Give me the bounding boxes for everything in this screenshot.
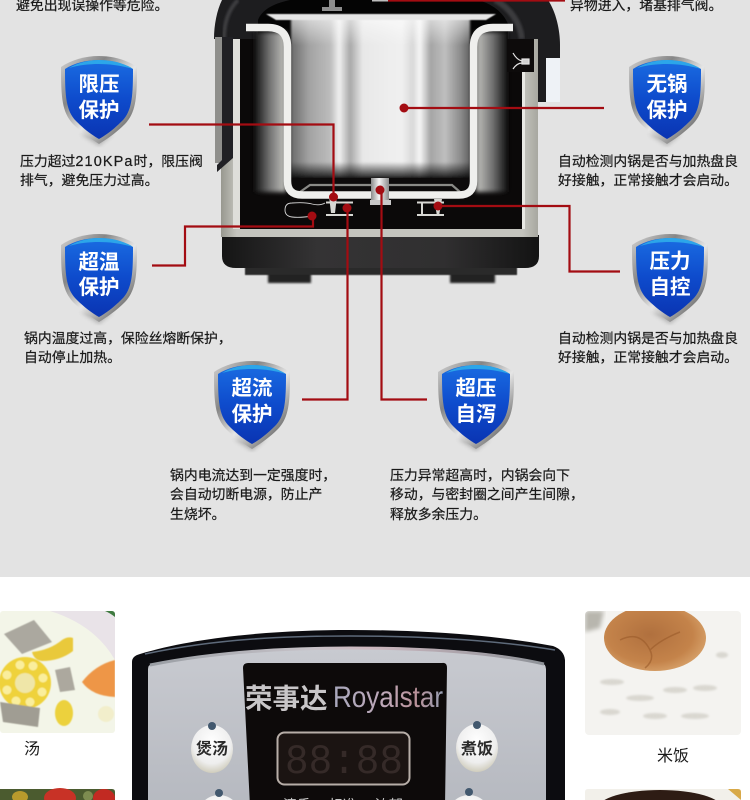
panel outer black frame xyxy=(132,630,565,800)
shield: limit pressure protection: 保护 xyxy=(78,99,120,122)
label: rice: 米饭 xyxy=(657,747,689,765)
connector: no pot line xyxy=(400,104,604,112)
left white trim xyxy=(233,39,240,229)
shield: over temperature protection xyxy=(61,234,137,324)
photo: dark sauce bowl (cropped) xyxy=(585,789,741,800)
panel: white food section background xyxy=(0,577,750,800)
text: limit pressure description: 压力超过210KPa时，限压阀 xyxy=(20,153,203,170)
outer white pot liner xyxy=(246,28,513,195)
shield: over pressure self release: 自泻 xyxy=(456,403,496,426)
connector: pressure control line xyxy=(434,202,620,272)
lid inner shading xyxy=(258,0,508,39)
right glow xyxy=(476,32,508,192)
text: over current description: 生烧坏。 xyxy=(170,506,225,522)
button: cook rice xyxy=(456,721,498,772)
shield: over current protection: 超流 xyxy=(232,377,273,400)
under pot space xyxy=(291,178,470,192)
photo: rice with plum xyxy=(585,605,741,735)
top valve stem xyxy=(322,0,342,11)
shield: pressure auto control: 压力 xyxy=(650,250,690,273)
text: limit pressure description: 排气，避免压力过高。 xyxy=(20,172,158,188)
connector: limit valve line xyxy=(149,124,338,202)
connector: over current line xyxy=(302,204,352,400)
label: soup: 汤 xyxy=(24,740,40,758)
fuse wire xyxy=(285,203,325,217)
shield: no pot protection xyxy=(629,56,705,146)
text: pressure control description: 自动检测内锅是否与加热盘良 xyxy=(558,330,738,346)
panel silver plate xyxy=(148,647,546,800)
left handle strip xyxy=(215,37,222,163)
text: over temperature description: 自动停止加热。 xyxy=(24,349,121,365)
shield: over current protection: 保护 xyxy=(232,403,272,426)
cooker feet xyxy=(268,268,495,283)
photo: soup xyxy=(0,611,115,733)
lid highlight curve xyxy=(495,0,522,39)
shield: over temperature protection: 超温 xyxy=(78,251,120,274)
shield: over temperature protection: 保护 xyxy=(78,276,120,299)
button: cook rice: 煮饭 xyxy=(461,740,493,758)
text: over current description: 会自动切断电源，防止产 xyxy=(170,486,322,502)
cooker black interior xyxy=(240,39,523,229)
brand name Chinese: 荣事达 xyxy=(245,683,328,714)
button: soup: 煲汤 xyxy=(196,740,228,758)
left handle xyxy=(217,37,233,172)
lid shell and right handle xyxy=(214,0,560,102)
brand name Latin: Royalstar xyxy=(333,681,443,714)
shield: limit pressure protection: 限压 xyxy=(78,73,120,96)
LED display xyxy=(278,732,410,784)
heating plate xyxy=(300,185,460,192)
black sensor box xyxy=(507,39,534,72)
top sensor xyxy=(372,0,388,2)
text: over pressure description: 释放多余压力。 xyxy=(390,506,487,522)
left limit valve assembly xyxy=(326,196,353,216)
button: lower right xyxy=(455,788,483,800)
text: over current description: 锅内电流达到一定强度时， xyxy=(170,467,336,483)
shield: pressure auto control: 自控 xyxy=(650,276,690,299)
photo: vegetables (cropped) xyxy=(0,788,115,800)
panel top rim strip xyxy=(150,648,544,665)
text: over temperature description: 锅内温度过高，保险丝熔断保护， xyxy=(24,330,232,346)
button: soup xyxy=(191,722,233,773)
LED digits: 88:88 xyxy=(285,738,403,786)
shield: over current protection xyxy=(214,361,290,451)
text: no pot description: 自动检测内锅是否与加热盘良 xyxy=(558,153,738,169)
cooker silver body xyxy=(221,39,538,237)
right white panel xyxy=(546,58,560,102)
connector: top sensor line xyxy=(388,0,565,2)
button: lower left xyxy=(205,789,233,800)
text: over pressure description: 压力异常超高时，内锅会向下 xyxy=(390,467,570,483)
cooker lower step xyxy=(245,264,517,275)
shield: no pot protection: 无锅 xyxy=(646,73,688,96)
text: pressure control description: 好接触，正常接触才会启动。 xyxy=(558,349,738,365)
sensor icon xyxy=(513,53,529,69)
left lid highlight curve xyxy=(224,0,238,39)
cooker base xyxy=(222,235,539,268)
centre pressure tube xyxy=(370,178,391,205)
text: no pot description: 好接触，正常接触才会启动。 xyxy=(558,172,738,188)
inner pot xyxy=(291,16,470,178)
left glow xyxy=(254,32,286,192)
text: over pressure description: 移动，与密封圈之间产生间隙， xyxy=(390,486,584,502)
right white trim xyxy=(522,39,525,229)
shield: pressure auto control xyxy=(632,234,708,324)
shield: limit pressure protection xyxy=(61,56,137,146)
shield: over pressure self release: 超压 xyxy=(456,377,496,400)
control panel xyxy=(132,630,565,800)
shield: no pot protection: 保护 xyxy=(646,99,688,122)
black display area xyxy=(243,663,447,800)
shield: over pressure self release xyxy=(438,361,514,451)
panel rim highlight xyxy=(145,636,555,654)
connector: over temperature line xyxy=(152,212,316,266)
right pressure switch xyxy=(417,199,444,216)
illustration: pressure cooker cross-section xyxy=(214,0,560,283)
pot lip xyxy=(266,14,496,20)
panel: grey safety section background xyxy=(0,0,750,577)
connector: over pressure release line xyxy=(376,186,427,400)
